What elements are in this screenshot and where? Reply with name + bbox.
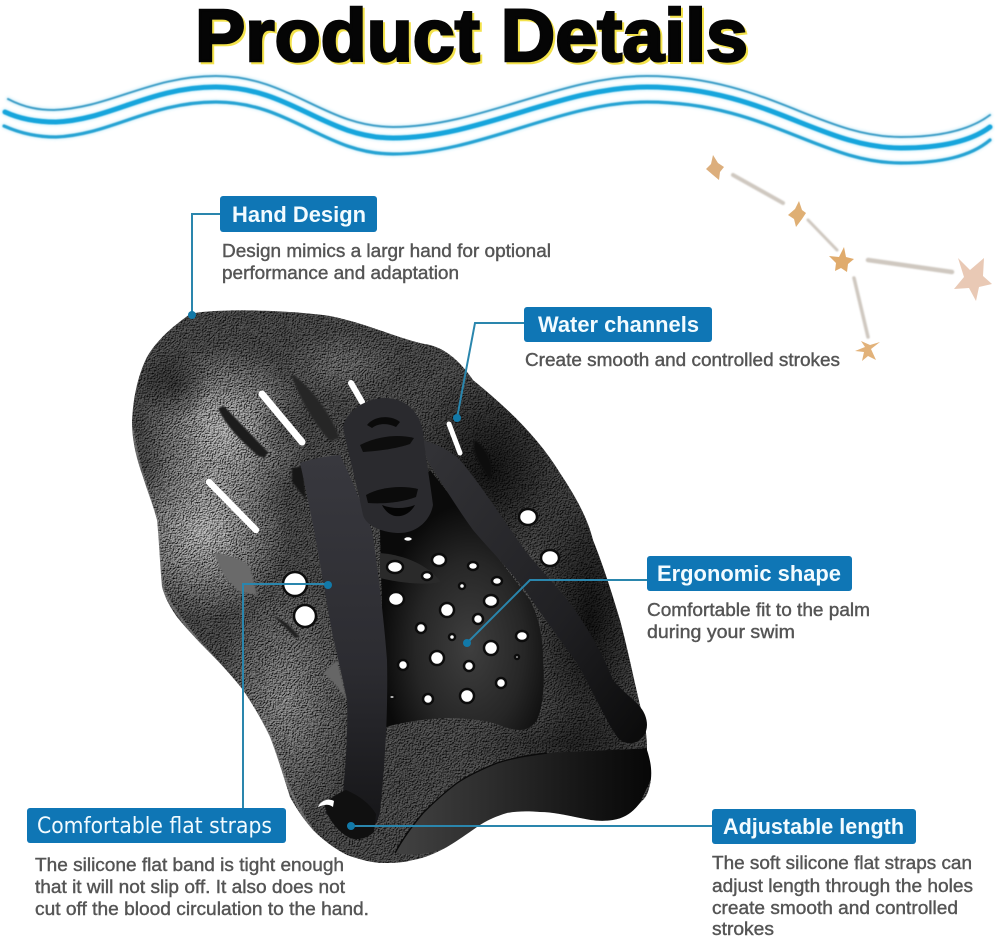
leader line [347,822,712,830]
icon: medium star [829,247,854,272]
label [524,307,712,342]
callout: ergonomic shape [463,556,870,647]
leader line [453,323,524,422]
callout: water channels [453,307,840,422]
icon: lower star [855,341,880,361]
wave lines [4,76,990,163]
description: The soft silicone flat straps can [712,853,972,873]
description: Create smooth and controlled strokes [525,350,840,370]
white slots [209,383,460,530]
description: The silicone flat band is tight enough [35,855,344,875]
palm holes [283,509,623,704]
icon: small star one [706,155,724,180]
icon: large star [954,258,992,301]
description: create smooth and controlled [712,898,958,918]
palm area [380,470,544,730]
constellation decoration [706,155,992,361]
constellation link lines [733,175,952,337]
description: cut off the blood circulation to the hand. [35,899,369,919]
description: Design mimics a largr hand for optional [222,241,551,261]
description [647,600,870,642]
label: Water channels [538,312,699,337]
label [220,196,377,232]
label: Ergonomic shape [657,561,841,586]
palm ridge [380,553,441,584]
label [27,808,286,843]
label: Adjustable length [723,814,904,839]
label: Comfortable flat straps [37,814,272,839]
leader line [188,214,220,319]
description [35,855,369,919]
strap peg hole [318,800,334,807]
callout: hand design [188,196,551,319]
description: during your swim [647,622,795,642]
panel: hand paddle product [120,300,680,870]
label: Hand Design [232,202,366,227]
leader line [463,580,647,647]
strap buckle nub [324,790,376,839]
recess slot and grooves [215,374,492,700]
left strap [300,455,387,839]
label [647,556,852,591]
thumb lip [395,748,660,855]
description: performance and adaptation [222,263,459,283]
description: Comfortable fit to the palm [647,600,870,620]
paddle body [120,300,680,870]
label [712,809,916,844]
right strap [423,440,647,743]
finger band [343,398,433,533]
leader line [243,581,332,808]
description [222,241,551,283]
description [712,853,973,938]
icon: small star two [788,201,806,227]
callout: comfortable flat straps [27,581,369,919]
rim highlight [132,427,313,830]
callout: adjustable length [347,809,973,938]
description: that it will not slip off. It also does not [35,877,345,897]
description: adjust length through the holes [712,876,973,896]
